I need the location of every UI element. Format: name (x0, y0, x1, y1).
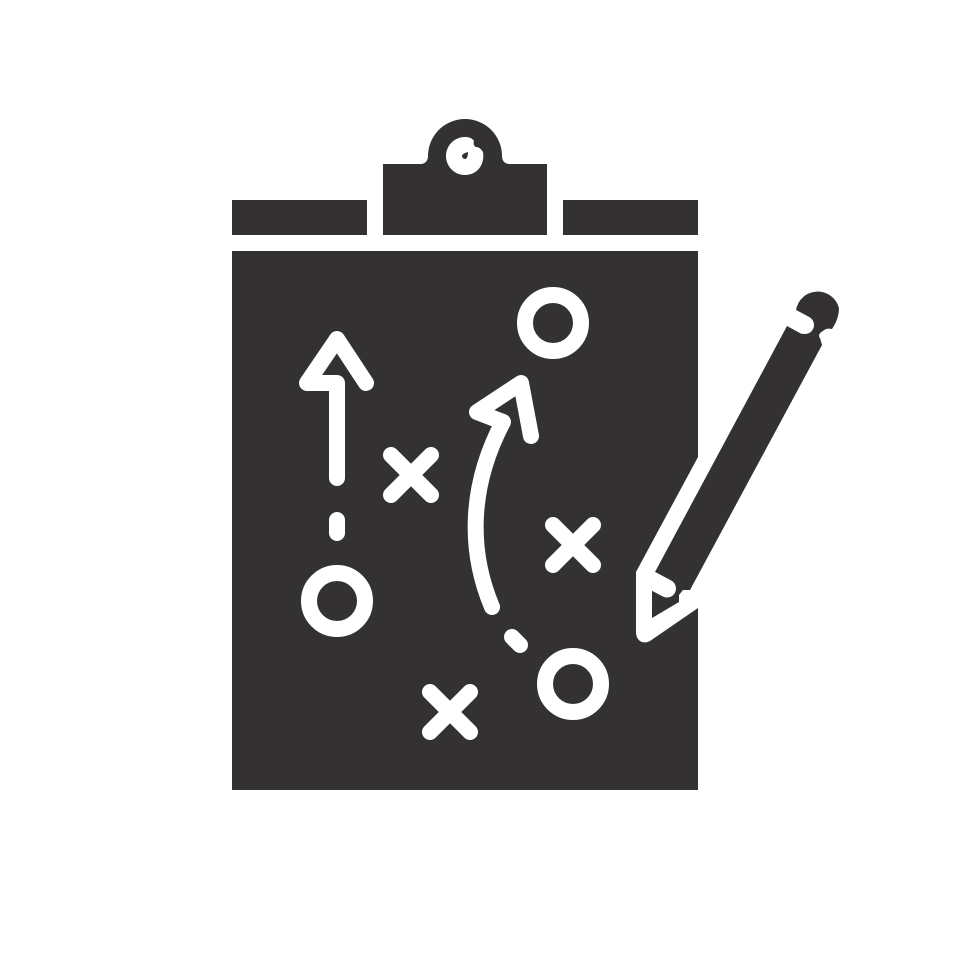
pencil eraser (796, 292, 839, 345)
curved arrow (476, 383, 531, 607)
pencil body (652, 326, 822, 618)
pencil (636, 292, 839, 642)
tactic diagram (307, 295, 601, 732)
pencil white outline on board (636, 457, 698, 642)
clipboard top bar left (232, 200, 367, 235)
straight arrow (307, 339, 366, 478)
cross player centre left (391, 455, 431, 495)
circle player top (525, 295, 581, 351)
pencil tip band gap (651, 580, 667, 588)
pencil top band gap (775, 309, 805, 325)
circle player left (309, 573, 365, 629)
dash below curved arrow (512, 637, 520, 645)
cross player right (553, 525, 593, 565)
cross player bottom (430, 692, 470, 732)
clipboard board (232, 251, 698, 790)
dash below straight arrow (329, 520, 345, 533)
clipboard clip (383, 119, 547, 235)
clipboard top bar right (563, 200, 698, 235)
clip hole centre dot (462, 152, 468, 159)
circle player bottom right (545, 656, 601, 712)
clip hole (446, 137, 483, 175)
